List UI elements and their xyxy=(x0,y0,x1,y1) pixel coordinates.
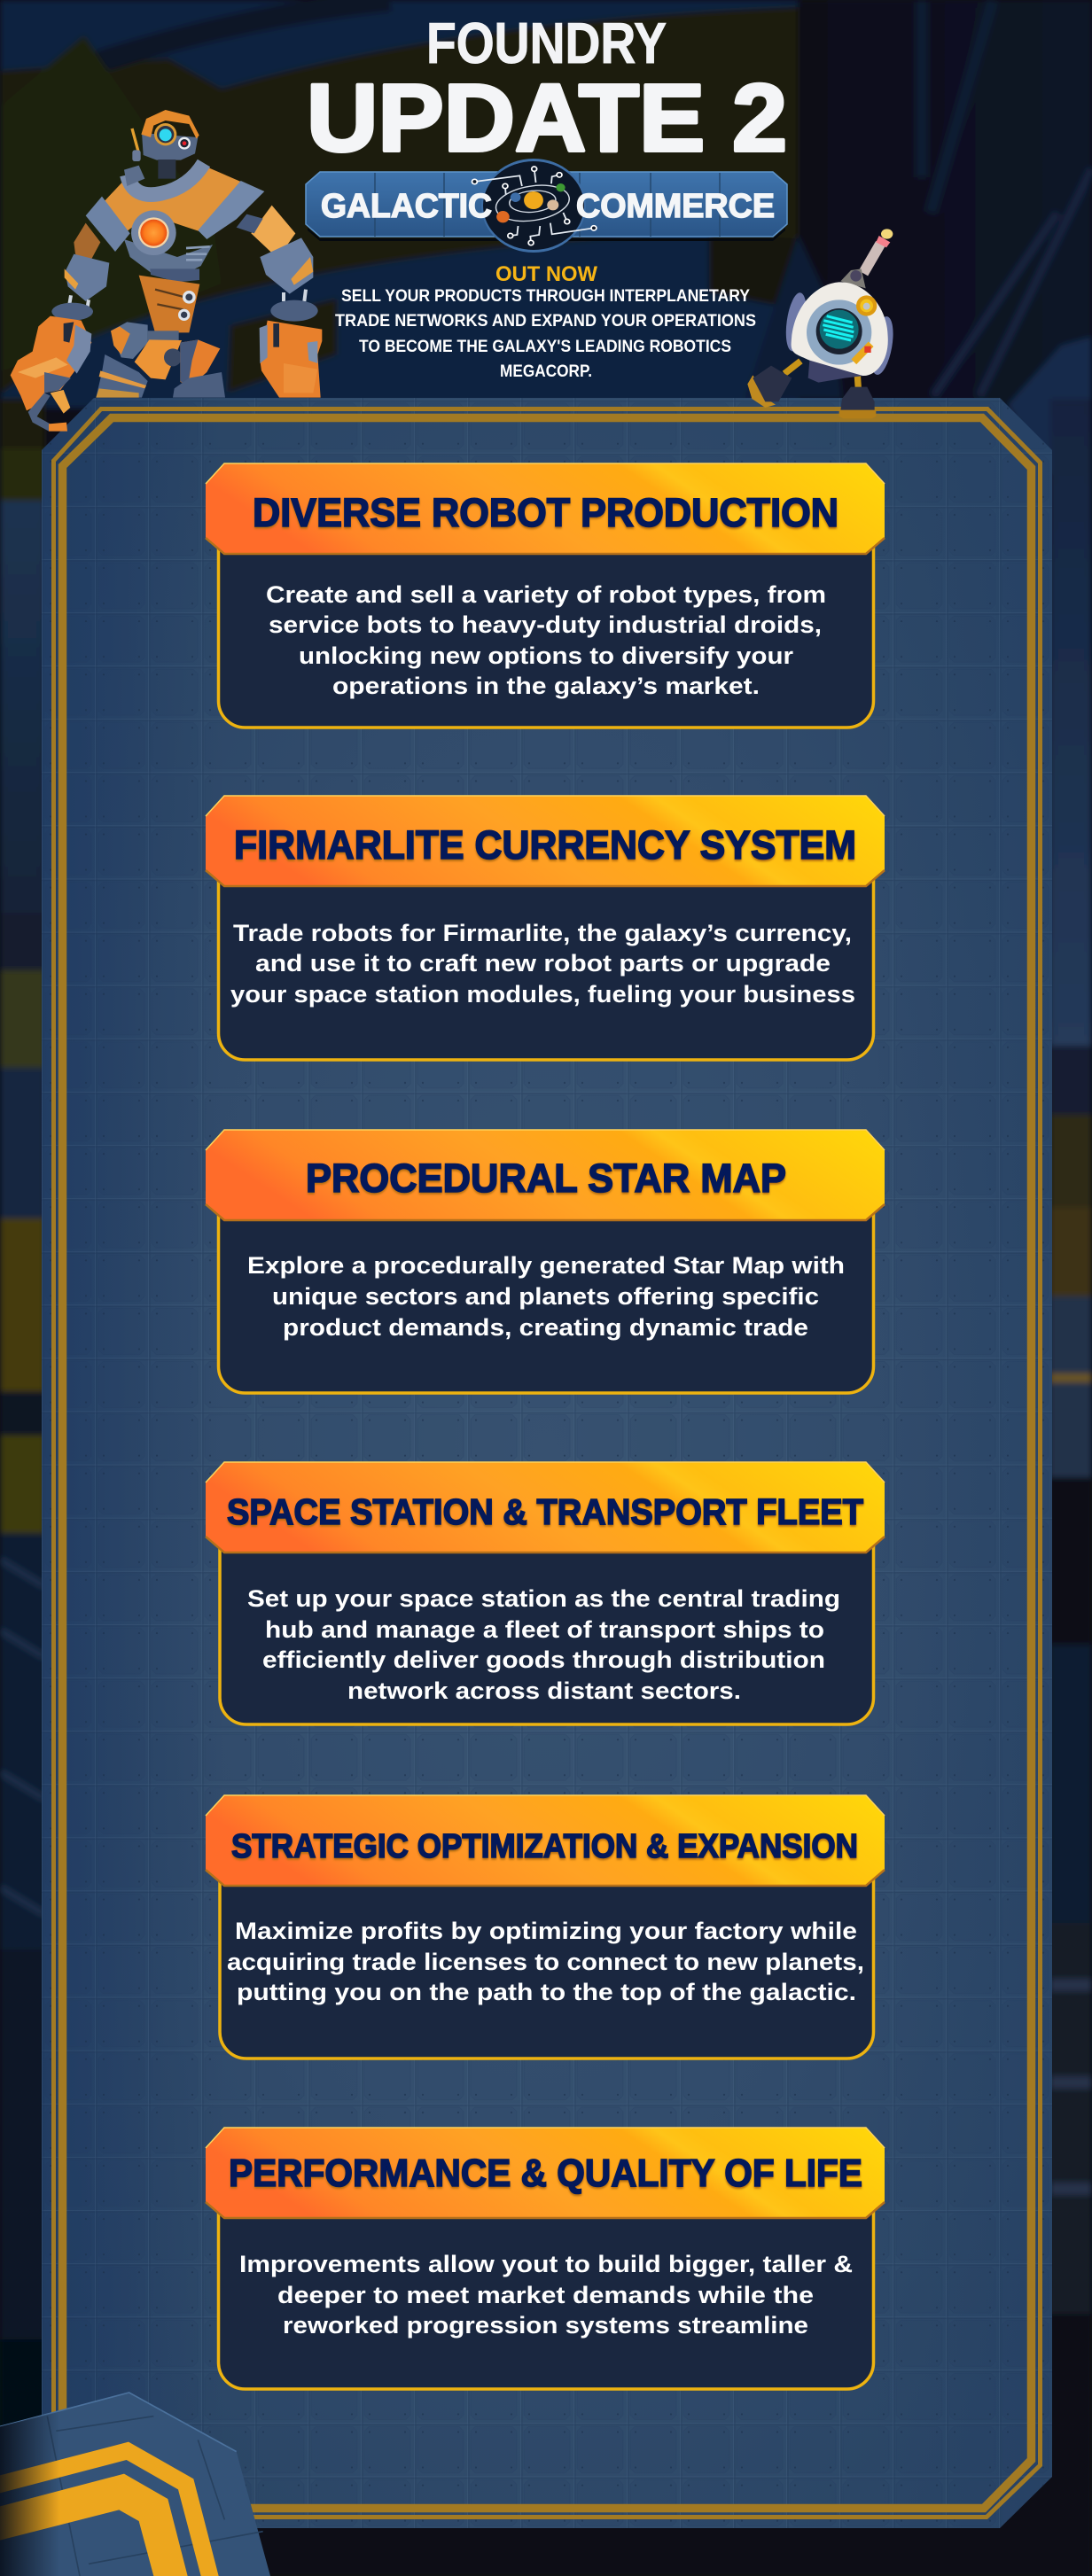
intro text xyxy=(335,287,756,381)
intro text: TO BECOME THE GALAXY'S LEADING ROBOTICS xyxy=(359,338,731,356)
card 5 body: Maximize profits by optimizing your factory while xyxy=(235,1918,857,1944)
card 3 body: product demands, creating dynamic trade xyxy=(283,1314,808,1341)
card 2 banner xyxy=(206,796,885,886)
card 3 banner: PROCEDURAL STAR MAP xyxy=(306,1156,786,1201)
card 3 body xyxy=(218,1175,874,1393)
card 6 body xyxy=(218,2172,874,2389)
card 3 body: Explore a procedurally generated Star Map with xyxy=(247,1252,845,1279)
card 2 banner: FIRMARLITE CURRENCY SYSTEM xyxy=(234,822,856,868)
corner plate: bottom left xyxy=(0,2393,270,2576)
card 3: procedural star map xyxy=(206,1130,885,1393)
card 2 body: and use it to craft new robot parts or upgrade xyxy=(255,950,831,977)
card 6 body: reworked progression systems streamline xyxy=(283,2312,808,2339)
card 2 body xyxy=(218,842,874,1060)
card 4 body: hub and manage a fleet of transport ships to xyxy=(265,1616,824,1643)
logo: galactic commerce xyxy=(306,159,787,253)
card 1 body: service bots to heavy-duty industrial droids, xyxy=(269,611,822,638)
card 3 body: unique sectors and planets offering specific xyxy=(272,1283,819,1310)
logo word: GALACTIC: GALACTIC xyxy=(321,188,492,225)
card 4 body: network across distant sectors. xyxy=(347,1677,741,1704)
card 1 banner: DIVERSE ROBOT PRODUCTION xyxy=(253,490,838,535)
card 2 body: Trade robots for Firmarlite, the galaxy’s currency, xyxy=(233,920,852,946)
card 1 body xyxy=(218,510,874,728)
card 1 body: unlocking new options to diversify your xyxy=(299,642,794,669)
icon: orange robot xyxy=(11,110,322,432)
card 3 banner xyxy=(206,1130,885,1220)
card 6 body: Improvements allow yout to build bigger, taller & xyxy=(239,2251,853,2277)
card 4 body: efficiently deliver goods through distribution xyxy=(262,1646,825,1673)
card 4: space station and transport fleet xyxy=(206,1462,885,1724)
card 1 banner xyxy=(206,463,885,554)
card 2 body: your space station modules, fueling your business xyxy=(230,981,855,1008)
left strip xyxy=(0,399,44,452)
card 6 body: deeper to meet market demands while the xyxy=(277,2282,814,2308)
intro text: TRADE NETWORKS AND EXPAND YOUR OPERATIONS xyxy=(335,312,756,331)
card 1: diverse robot production xyxy=(206,463,885,728)
icon: white round robot xyxy=(747,229,897,418)
card 4 body: Set up your space station as the central trading xyxy=(247,1585,840,1612)
card 6: performance and quality of life xyxy=(206,2128,885,2389)
card 6 banner: PERFORMANCE & QUALITY OF LIFE xyxy=(229,2152,862,2195)
logo emblem xyxy=(472,159,597,253)
card 5 body: putting you on the path to the top of the galactic. xyxy=(237,1979,856,2005)
card 1 body: operations in the galaxy’s market. xyxy=(332,673,760,699)
intro text: MEGACORP. xyxy=(500,362,592,381)
card 6 banner xyxy=(206,2128,885,2218)
title: UPDATE 2: UPDATE 2 xyxy=(307,64,787,171)
main panel xyxy=(42,398,1052,2528)
logo word: COMMERCE: COMMERCE xyxy=(576,188,775,225)
card 4 banner xyxy=(206,1462,885,1553)
card 2: firmarlite currency system xyxy=(206,796,885,1060)
card 5 banner: STRATEGIC OPTIMIZATION & EXPANSION xyxy=(231,1828,858,1865)
out now label: OUT NOW xyxy=(495,262,597,286)
card 4 banner: SPACE STATION & TRANSPORT FLEET xyxy=(227,1491,863,1532)
card 4 body xyxy=(220,1507,874,1724)
card 5 body xyxy=(220,1841,874,2058)
title: FOUNDRY: FOUNDRY xyxy=(426,11,667,75)
card 5 body: acquiring trade licenses to connect to new planets, xyxy=(227,1949,864,1975)
card 1 body: Create and sell a variety of robot types, from xyxy=(266,581,826,608)
card 5: strategic optimization and expansion xyxy=(206,1795,885,2058)
right strip xyxy=(1050,399,1092,1046)
intro text: SELL YOUR PRODUCTS THROUGH INTERPLANETARY xyxy=(341,287,750,306)
card 5 banner xyxy=(206,1795,885,1886)
